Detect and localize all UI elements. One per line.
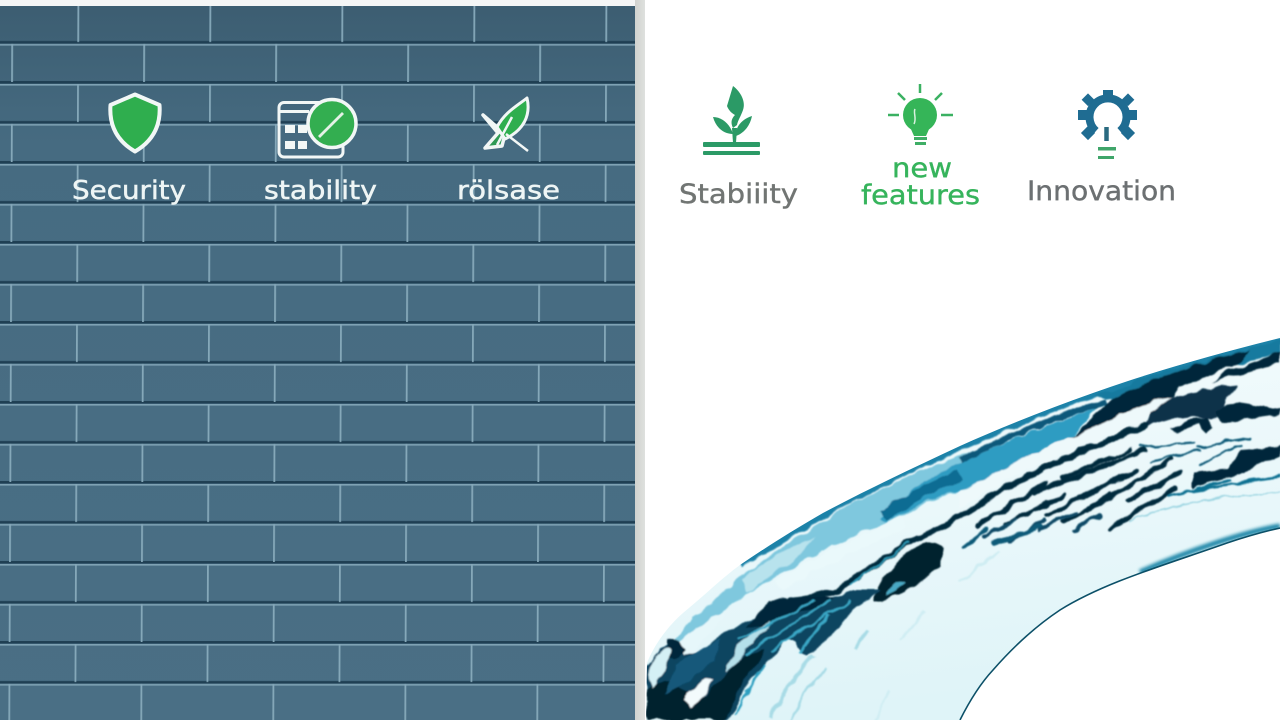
icon: security shield [110,94,160,152]
icon: light bulb [888,84,953,145]
water: soft body streaks [770,552,1000,720]
label: stability: stability [264,176,377,206]
water: upper white gap [960,396,1173,492]
label: Security: Security [72,176,186,206]
panel: brick wall [0,0,645,720]
label: Stability: Stabiiity [679,179,798,210]
icon: leaf [483,98,528,151]
icon: gear with bulb [1078,90,1137,159]
water: central dark current [790,425,1280,600]
label: new features: features [861,180,980,211]
label: new features: new [892,153,952,184]
water: textured interior [646,338,1280,720]
label: new features [861,153,980,211]
label: release: rölsase [457,176,560,206]
icon: plant [703,86,760,155]
water: dark swirl [850,542,943,601]
icon: calendar with check circle [279,100,356,157]
water: dark upper stream [1070,350,1280,487]
water: blue top band [740,338,1280,565]
water: inner edge shading [1140,526,1280,572]
water: upper pale blue band [673,445,999,656]
illustration: water arc [640,330,1280,720]
label: Innovation: Innovation [1027,176,1176,207]
water: inner edge line [960,528,1280,720]
water: lower left turbulence [646,590,880,720]
